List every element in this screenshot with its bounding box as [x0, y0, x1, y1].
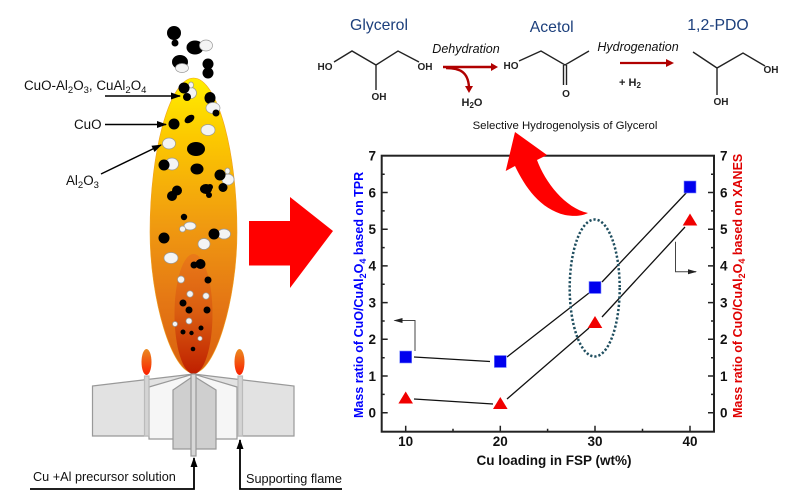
label: CuO	[74, 117, 166, 132]
reaction caption: Selective Hydrogenolysis of Glycerol	[473, 120, 657, 132]
right axis ticks: 5	[720, 222, 728, 237]
1,2-PDO: 1,2-PDO	[687, 17, 749, 34]
right axis title: O	[731, 263, 745, 273]
left axis title: 2	[358, 273, 368, 278]
left axis ticks	[368, 148, 376, 420]
TPR series markers	[400, 181, 696, 368]
dotted ellipse highlight	[570, 220, 620, 356]
x axis ticks: 40	[682, 434, 698, 449]
axis direction arrow: left	[394, 320, 415, 351]
hydrogenation arrow: Hydrogenation	[597, 40, 679, 54]
label: Al2O3: 3	[94, 180, 99, 191]
hydrogenation arrow	[597, 40, 679, 90]
reaction scheme	[318, 17, 778, 132]
right axis ticks: 4	[720, 258, 728, 274]
left axis ticks: 0	[368, 406, 376, 420]
side flames	[142, 349, 152, 375]
dehydration arrow: H	[462, 97, 469, 109]
left axis ticks: 6	[368, 186, 376, 200]
right axis ticks: 2	[720, 332, 728, 347]
flame spray reactor	[92, 26, 294, 456]
x axis title: Cu loading in FSP (wt%)	[476, 453, 632, 468]
label: CuO-Al2O3, CuAl2O4: 2	[125, 85, 131, 96]
x axis ticks	[398, 434, 698, 449]
glycerol: OH	[418, 62, 432, 73]
hydrogenation arrow: 2	[636, 81, 641, 90]
acetol	[504, 19, 589, 100]
label: Al2O3: Al	[66, 173, 78, 188]
left axis ticks: 5	[368, 222, 376, 237]
label: CuO-Al2O3, CuAl2O4: 2	[68, 85, 73, 96]
curved red arrow	[506, 132, 588, 216]
right axis ticks: 1	[720, 369, 728, 384]
1,2-PDO: OH	[714, 97, 728, 108]
acetol: Acetol	[530, 19, 574, 36]
left axis ticks: 2	[368, 332, 376, 347]
right axis title: Mass ratio of CuO/CuAl	[731, 278, 745, 418]
main flame	[150, 78, 237, 373]
right axis ticks	[720, 148, 728, 420]
hydrogenation arrow: + H	[619, 77, 636, 89]
right axis title: 4	[737, 259, 747, 264]
glycerol: OH	[372, 92, 386, 103]
left axis title: 4	[358, 259, 368, 264]
label: supporting flame	[240, 440, 342, 489]
label: CuO-Al2O3, CuAl2O4: 4	[141, 85, 146, 96]
label: CuO-Al2O3, CuAl2O4: O	[131, 78, 141, 93]
x axis ticks: 10	[398, 434, 413, 449]
x axis ticks: 30	[587, 434, 603, 449]
glycerol: HO	[318, 62, 333, 73]
series lines	[414, 192, 687, 404]
left axis title: based on TPR	[352, 172, 366, 259]
right axis ticks: 7	[720, 148, 728, 164]
left axis ticks: 1	[368, 369, 376, 384]
XANES series markers	[398, 214, 697, 409]
label: Al2O3	[66, 145, 161, 191]
label: CuO-Al2O3, CuAl2O4: , CuAl	[89, 78, 125, 93]
right axis ticks: 3	[720, 296, 728, 310]
right axis ticks: 0	[720, 406, 728, 420]
dehydration arrow: Dehydration	[432, 42, 500, 56]
chart	[352, 148, 747, 468]
label: CuO-Al2O3, CuAl2O4: O	[73, 78, 84, 93]
dehydration arrow	[432, 42, 500, 110]
label: CuO-Al2O3, CuAl2O4: CuO-Al	[24, 78, 68, 93]
label: CuO-Al2O3, CuAl2O4	[24, 78, 180, 96]
label: precursor solution	[30, 458, 194, 489]
label: precursor solution: Cu +Al precursor solution	[33, 470, 176, 484]
particles	[158, 26, 234, 351]
right axis title: based on XANES	[731, 154, 745, 259]
left axis ticks: 4	[368, 258, 376, 274]
acetol: O	[562, 89, 570, 100]
acetol: HO	[504, 61, 519, 72]
dehydration arrow: O	[474, 97, 483, 109]
label: CuO: CuO	[74, 117, 102, 132]
glycerol: Glycerol	[350, 17, 408, 34]
glycerol	[318, 17, 432, 103]
inner flame	[174, 254, 212, 374]
dehydration arrow: 2	[469, 101, 474, 110]
left axis title: O	[352, 263, 366, 273]
right axis ticks: 6	[720, 186, 728, 200]
right axis title: 2	[737, 273, 747, 278]
1,2-PDO	[687, 17, 778, 108]
label: CuO-Al2O3, CuAl2O4: 3	[84, 85, 89, 96]
label: Al2O3: O	[83, 173, 94, 188]
x axis ticks: 20	[493, 434, 508, 449]
axis direction arrow: right	[676, 242, 696, 272]
left axis title: Mass ratio of CuO/CuAl	[352, 278, 366, 418]
plot frame	[382, 156, 714, 432]
label: Al2O3: 2	[78, 180, 83, 191]
left axis ticks: 7	[368, 148, 376, 164]
left axis ticks: 3	[368, 296, 376, 310]
1,2-PDO: OH	[764, 65, 778, 76]
label: supporting flame: Supporting flame	[246, 472, 342, 486]
nozzle	[92, 374, 294, 456]
big red arrow	[249, 197, 333, 288]
